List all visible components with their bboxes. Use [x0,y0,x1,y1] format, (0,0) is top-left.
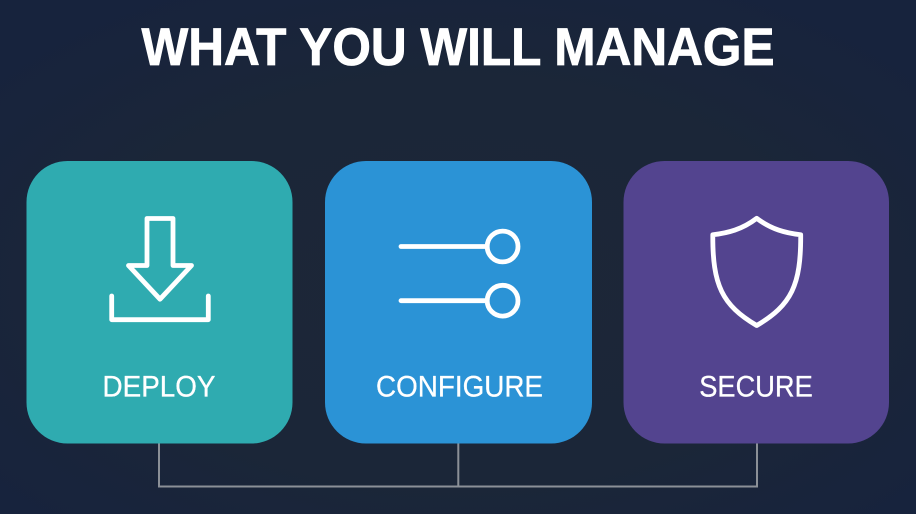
panel: deploy [26,161,292,444]
title: WHAT YOU WILL MANAGE [142,18,774,77]
icon: download arrow into tray [112,218,208,320]
panel: secure [624,161,889,444]
label: secure: SECURE [699,370,813,404]
connector lines linking the three cards [159,443,757,486]
panel: configure [325,161,592,444]
icon: sliders [401,231,518,316]
icon: shield [713,218,801,326]
label: deploy: DEPLOY [102,370,216,404]
label: configure: CONFIGURE [376,370,543,404]
